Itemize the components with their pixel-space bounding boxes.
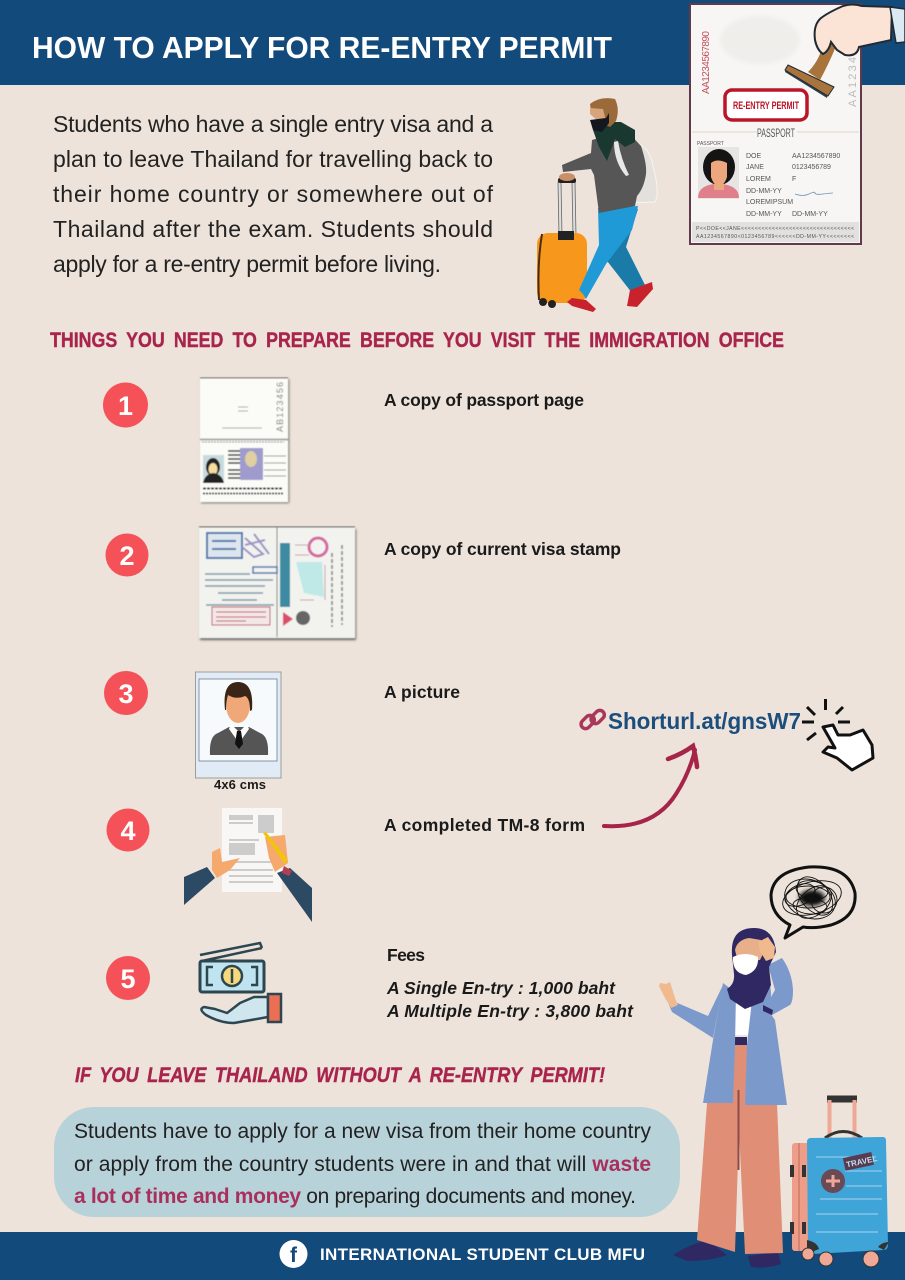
callout: Students have to apply for a new visa from their home country (74, 1120, 652, 1143)
passport illustration with stamp: PASSPORT (757, 128, 795, 140)
passport illustration with stamp: AA1234567890 (701, 31, 712, 94)
icon: traveller with orange suitcase (537, 98, 657, 312)
item 3 label: A picture (384, 682, 460, 702)
item 1 passport copy: AB123456 (275, 382, 285, 432)
item 2 label: A copy of current visa stamp (384, 539, 621, 559)
item 1 label: A copy of passport page (384, 390, 584, 410)
item 5 fees text: Fees (387, 945, 425, 965)
intro text block: apply for a re-entry permit before living. (53, 251, 441, 277)
item 5 fees text (386, 945, 634, 1021)
section heading: things to prepare: THINGS YOU NEED TO PREPARE BEFORE YOU VISIT THE IMMIGRATION OFFICE (50, 329, 784, 352)
blue suitcase (790, 1099, 889, 1267)
cardigan (703, 983, 787, 1105)
passport illustration with stamp: RE-ENTRY PERMIT (733, 100, 799, 112)
passport illustration with stamp: LOREM (746, 176, 771, 183)
section heading: without re-entry permit: IF YOU LEAVE THAILAND WITHOUT A RE-ENTRY PERMIT! (75, 1064, 605, 1087)
item 4 form being filled (184, 808, 312, 922)
passport illustration with stamp: DD-MM-YY (792, 211, 828, 218)
passport illustration with stamp: LOREMIPSUM (746, 199, 793, 206)
icon: facebook (280, 1240, 308, 1268)
passport illustration with stamp: JANE (746, 164, 764, 171)
footer text: INTERNATIONAL STUDENT CLUB MFU (320, 1245, 645, 1264)
shoes (673, 1241, 727, 1261)
title: HOW TO APPLY FOR RE-ENTRY PERMIT (32, 30, 612, 65)
item 2 number: 2 (119, 541, 135, 571)
woman with luggage (659, 928, 889, 1268)
item 2 number (106, 534, 148, 576)
footer band (0, 1232, 905, 1280)
item 5 number (106, 956, 150, 1000)
icon: thought bubble with scribble (771, 867, 855, 938)
passport illustration with stamp (690, 4, 905, 244)
callout: or apply from the country students were in and that will waste (74, 1153, 651, 1176)
arrow to link (604, 746, 697, 826)
passport illustration with stamp: AA1234 (847, 57, 859, 107)
wide trousers (697, 1045, 783, 1254)
callout (54, 1107, 680, 1217)
passport illustration with stamp: AA1234567890<0123456789<<<<<<DD-MM-YY<<<<<<<< (696, 234, 854, 240)
passport illustration with stamp: P<<DOE<<JANE<<<<<<<<<<<<<<<<<<<<<<<<<<<<<<<<< (696, 226, 854, 232)
item 4 number: 4 (120, 816, 136, 846)
hijab and face (727, 928, 776, 1009)
item 5 number: 5 (120, 964, 136, 994)
item 3 number (104, 671, 148, 715)
passport illustration with stamp: 0123456789 (792, 164, 831, 171)
passport illustration with stamp: DD-MM-YY (746, 211, 782, 218)
blue suitcase: TRAVEL (845, 1154, 878, 1169)
item 4 label: A completed TM-8 form (384, 815, 585, 835)
item 5 fees text: A Single En-try : 1,000 baht (386, 978, 616, 998)
passport illustration with stamp: DD-MM-YY (746, 188, 782, 195)
passport illustration with stamp: F (792, 176, 796, 183)
intro text block: Thailand after the exam. Students should (53, 216, 493, 242)
callout: a lot of time and money on preparing documents and money. (74, 1185, 636, 1208)
icon: facebook: f (290, 1244, 298, 1267)
intro text block: their home country or somewhere out of (53, 181, 494, 207)
item 3 photo (196, 672, 281, 778)
shirt and belt (735, 993, 752, 1035)
header band (0, 0, 905, 85)
item 1 number (103, 382, 148, 428)
passport illustration with stamp: AA1234567890 (792, 153, 840, 160)
photo size caption: 4x6 cms (214, 777, 266, 792)
intro text block (53, 111, 494, 277)
item 3 number: 3 (118, 679, 134, 709)
item 4 number (106, 808, 150, 852)
item 5 fees text: A Multiple En-try : 3,800 baht (386, 1001, 634, 1021)
icon: clicking hand (802, 699, 873, 770)
item 2 visa stamp copy (199, 527, 355, 638)
passport illustration with stamp: PASSPORT (697, 141, 724, 147)
intro text block: plan to leave Thailand for travelling back to (53, 146, 493, 172)
icon: chain link (579, 709, 606, 730)
icon: money in hand (200, 943, 281, 1023)
item 1 passport copy (200, 378, 288, 502)
intro text block: Students who have a single entry visa and a (53, 111, 493, 137)
passport illustration with stamp: DOE (746, 153, 762, 160)
link text: Shorturl.at/gnsW7 (608, 708, 801, 734)
item 1 number: 1 (118, 391, 133, 421)
